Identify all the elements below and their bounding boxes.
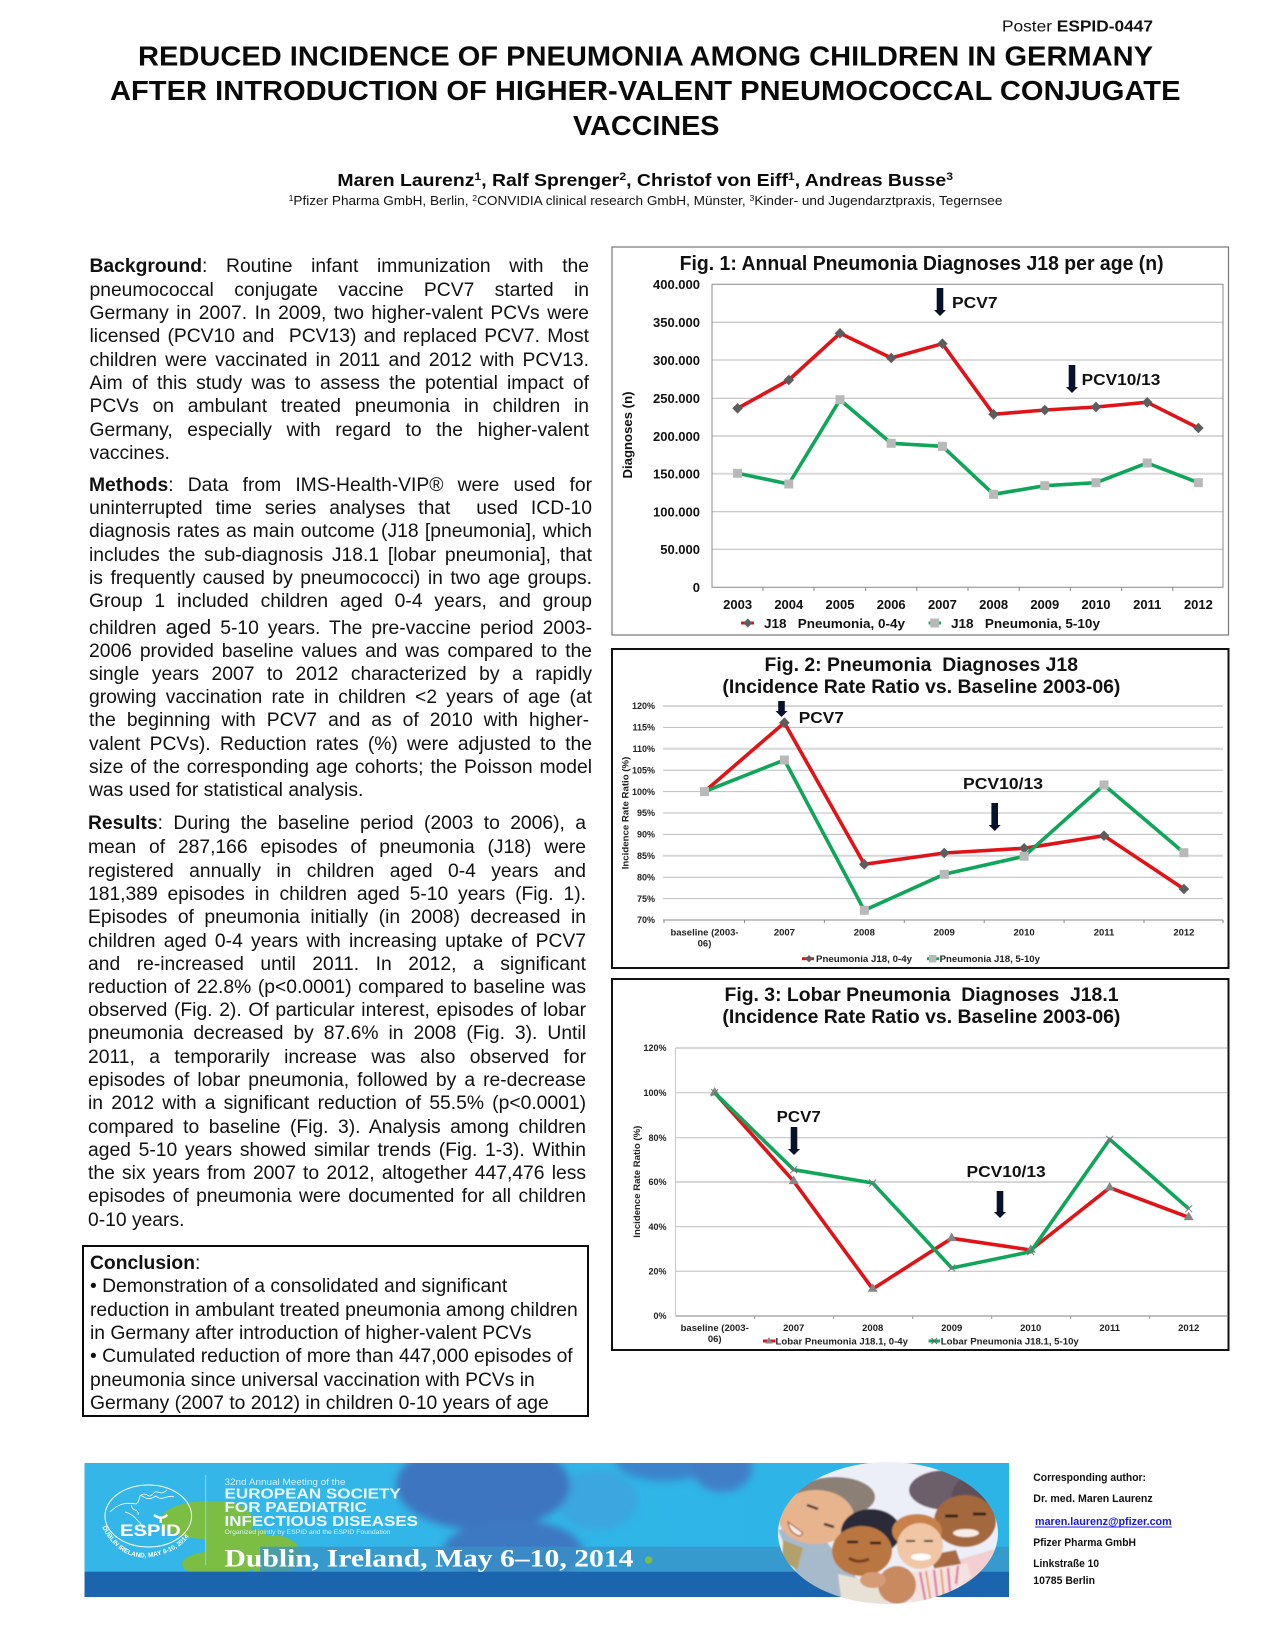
corresponding author: 10785 Berlin	[1033, 1575, 1095, 1587]
text block: methods: Methods: Data from IMS-Health-VIP® were used for	[89, 475, 592, 496]
affiliations: 2	[472, 194, 478, 203]
figure 2 y axis labels: 75%	[637, 894, 655, 904]
panel: conclusion: pneumonia since universal vaccination with PCVs in	[90, 1370, 535, 1391]
text block: results: reduction of 22.8% (p<0.0001) compared to baseline was	[88, 977, 586, 998]
logo caption: DUBLIN IRELAND, MAY 6-10, 2014	[102, 1525, 189, 1558]
figure 3 grid	[676, 1048, 1227, 1319]
arrow: PCV7	[788, 1127, 800, 1155]
figure 3 x axis labels	[681, 1323, 1199, 1345]
figure 3 y axis title: Incidence Rate Ratio (%)	[632, 1126, 643, 1238]
corresponding author	[1033, 1472, 1172, 1587]
text block: results: registered annually in children aged 0-4 years and	[88, 861, 586, 882]
figure 3 x axis labels: 06)	[708, 1334, 722, 1345]
label: PCV10/13: PCV10/13	[963, 776, 1043, 793]
panel: figure 3	[612, 979, 1228, 1350]
figure 2 y axis labels	[632, 701, 655, 925]
label: PCV7: PCV7	[777, 1109, 821, 1126]
figure 3 y axis labels: 120%	[643, 1043, 666, 1053]
authors: Maren Laurenz	[337, 170, 461, 190]
figure 1 y axis labels: 50.000	[660, 542, 700, 557]
text block: methods: is frequently caused by pneumococci) in two age groups.	[89, 568, 592, 589]
label: PCV10/13: PCV10/13	[966, 1164, 1046, 1181]
corresponding author: Pfizer Pharma GmbH	[1033, 1537, 1136, 1549]
label: PCV7: PCV7	[952, 295, 998, 312]
text block: methods: uninterrupted time series analyses that used ICD-10	[89, 498, 592, 519]
banner meeting text	[224, 1477, 634, 1572]
figure 2 legend: Pneumonia J18, 5-10y	[940, 954, 1041, 965]
figure 2 y axis labels: 110%	[632, 744, 655, 754]
figure 1 x axis labels: 2008	[979, 597, 1008, 612]
text block: methods: growing vaccination rate in children <2 years of age (at	[89, 687, 592, 708]
text block: results: observed (Fig. 2). Of particular interest, episodes of lobar	[88, 1000, 586, 1021]
arrow: PCV10/13	[1066, 365, 1078, 393]
figure 2 x axis labels: 06)	[698, 938, 711, 950]
logo: ESPID globe	[102, 1484, 192, 1558]
banner meeting text: 32nd Annual Meeting of the	[224, 1477, 346, 1488]
text block: background: PCVs on ambulant treated pneumonia in children in	[90, 396, 589, 417]
text block: background: Background: Routine infant immunization with the	[90, 256, 589, 277]
text block: results: pneumonia decreased by 87.6% in 2008 (Fig. 3). Until	[88, 1023, 586, 1044]
figure 3 line chart: 5-10y	[711, 1089, 1192, 1272]
authors: 3	[946, 171, 953, 183]
text block: methods	[89, 475, 592, 801]
corresponding author: Linkstraße 10	[1033, 1558, 1099, 1570]
banner meeting text: EUROPEAN SOCIETY	[224, 1486, 401, 1502]
figure 3 y axis labels	[643, 1043, 666, 1321]
text block: background	[90, 256, 589, 464]
corresponding author: Corresponding author:	[1033, 1472, 1146, 1484]
figure 2 x axis labels: 2008	[854, 928, 875, 938]
figure 2 x axis labels: 2009	[934, 928, 955, 938]
figure 2 x axis labels: 2010	[1014, 928, 1035, 938]
banner meeting text: Dublin, Ireland, May 6–10, 2014	[224, 1546, 634, 1572]
text block: background: licensed (PCV10 and PCV13) and replaced PCV7. Most	[90, 326, 589, 347]
figure 2 grid	[663, 706, 1223, 923]
text block: results	[88, 813, 586, 1231]
text block: results: Results: During the baseline period (2003 to 2006), a	[88, 813, 586, 834]
logo figure	[154, 1515, 167, 1523]
figure 2 heading: (Incidence Rate Ratio vs. Baseline 2003-06)	[722, 676, 1120, 698]
text block: methods: 2006 provided baseline values and was compared to the	[89, 641, 592, 662]
figure 2 x axis labels	[670, 928, 1194, 950]
text block: results: episodes of lobar pneumonia, followed by a re-decrease	[88, 1070, 586, 1091]
authors: 1	[474, 171, 481, 183]
banner band	[260, 1547, 1020, 1572]
figure 2 y axis labels: 95%	[637, 808, 655, 818]
figure 2 line chart: 5-10y	[700, 756, 1188, 915]
figure 1 x axis labels: 2006	[877, 597, 906, 612]
label: PCV10/13: PCV10/13	[1082, 372, 1160, 389]
figure 3 line chart: 0-4y	[710, 1087, 1194, 1292]
figure 3 y axis labels: 80%	[648, 1133, 666, 1143]
figure 2 legend	[802, 954, 1041, 965]
figure 2 y axis labels: 80%	[637, 872, 655, 882]
affiliations: CONVIDIA clinical research GmbH, Münster,	[477, 194, 749, 208]
figure 3 y axis labels: 100%	[643, 1088, 666, 1098]
figure 2 y axis labels: 85%	[637, 851, 655, 861]
figure 1 grid	[712, 284, 1223, 591]
label: PCV7: PCV7	[799, 710, 844, 727]
text block: results: 2011, a temporarily increase was also observed for	[88, 1047, 586, 1068]
figure 2 y axis labels: 70%	[637, 915, 655, 925]
left boy	[778, 1528, 888, 1604]
text block: methods: diagnosis rates as main outcome (J18 [pneumonia], which	[89, 521, 592, 542]
figure 1 legend: J18 Pneumonia, 5-10y	[951, 616, 1101, 631]
figure 1 y axis labels: 300.000	[653, 353, 700, 368]
title: VACCINES	[573, 110, 720, 141]
panel: conclusion: reduction in ambulant treated pneumonia among children	[90, 1300, 578, 1321]
authors: , Christof von Eiff	[626, 170, 788, 190]
striped shirt	[911, 1563, 971, 1604]
text block: results: 181,389 episodes in children aged 5-10 years (Fig. 1).	[88, 884, 586, 905]
panel: conclusion: Germany (2007 to 2012) in children 0-10 years of age	[90, 1393, 549, 1414]
text block: background: Germany in 2007. In 2009, two higher-valent PCVs were	[90, 303, 589, 324]
figure 2 line chart: 0-4y	[704, 717, 1189, 894]
figure 1 legend: J18 Pneumonia, 0-4y	[764, 616, 906, 631]
figure 1 y axis labels: 400.000	[653, 277, 700, 292]
figure 1 line chart: 0-4y	[732, 328, 1204, 433]
text block: results: children aged 0-4 years with increasing uptake of PCV7	[88, 931, 586, 952]
figure 2 legend: Pneumonia J18, 0-4y	[816, 954, 913, 965]
right girl	[908, 1470, 962, 1510]
figure 3 x axis labels: baseline (2003-	[681, 1323, 749, 1334]
figure 2 y axis labels: 115%	[632, 723, 655, 733]
corresponding author: maren.laurenz@pfizer.com	[1035, 1516, 1172, 1528]
banner meeting text: Organized jointly by ESPID and the ESPID Foundation	[224, 1530, 390, 1536]
panel: conclusion: • Demonstration of a consolidated and significant	[90, 1276, 507, 1297]
text block: results: in 2012 with a significant reduction of 55.5% (p<0.0001)	[88, 1093, 586, 1114]
text block: results: 0-10 years.	[88, 1210, 184, 1231]
banner meeting text: INFECTIOUS DISEASES	[224, 1514, 418, 1530]
text block: background: Germany, especially with regard to the higher-valent	[90, 420, 589, 441]
figure 1 x axis labels	[723, 597, 1213, 612]
small girl	[890, 1513, 942, 1542]
text block: background: pneumococcal conjugate vaccine PCV7 started in	[90, 280, 589, 301]
figure 1 y axis title: Diagnoses (n)	[620, 392, 635, 478]
figure 2 y axis title: Incidence Rate Ratio (%)	[620, 757, 632, 869]
figure 3 heading: (Incidence Rate Ratio vs. Baseline 2003-06)	[722, 1006, 1120, 1028]
banner shamrock	[161, 1501, 301, 1577]
authors: , Ralf Sprenger	[481, 170, 620, 190]
poster number: Poster ESPID-0447	[1002, 18, 1153, 36]
text block: results: and re-increased until 2011. In 2012, a significant	[88, 954, 586, 975]
text block: results: mean of 287,166 episodes of pneumonia (J18) were	[88, 837, 586, 858]
panel: conclusion: • Cumulated reduction of more than 447,000 episodes of	[90, 1346, 573, 1367]
text block: background: Aim of this study was to assess the potential impact of	[90, 373, 589, 394]
figure 3 heading	[722, 984, 1120, 1028]
figure 1 y axis labels	[653, 277, 700, 595]
figure 1 y axis labels: 350.000	[653, 315, 700, 330]
figure 1 y axis labels: 150.000	[653, 466, 700, 482]
figure 1 y axis labels: 250.000	[653, 391, 700, 406]
affiliations: 1	[289, 194, 294, 203]
logo wordmark: ESPID	[120, 1521, 181, 1540]
banner meeting text: FOR PAEDIATRIC	[224, 1500, 368, 1516]
figure 1 x axis labels: 2012	[1184, 597, 1213, 612]
affiliations: Pfizer Pharma GmbH, Berlin,	[293, 194, 472, 208]
figure 3 x axis labels: 2007	[783, 1323, 804, 1334]
text block: methods: size of the corresponding age cohorts; the Poisson model	[89, 757, 592, 778]
figure 3 legend: Lobar Pneumonia J18.1, 0-4y	[776, 1336, 909, 1348]
figure 3 y axis labels: 60%	[648, 1177, 666, 1187]
text block: methods: the beginning with PCV7 and as of 2010 with higher-	[89, 710, 589, 731]
figure 3 legend	[763, 1336, 1080, 1348]
authors: 1	[788, 171, 795, 183]
figure 2 x axis labels: 2011	[1094, 928, 1115, 938]
figure 2 heading: Fig. 2: Pneumonia Diagnoses J18	[764, 654, 1078, 676]
banner: ESPID 2014 meeting	[84, 1462, 1009, 1604]
figure 2 heading	[722, 654, 1120, 698]
photo: smiling children	[778, 1462, 998, 1604]
text block: methods: Group 1 included children aged 0-4 years, and group	[89, 591, 592, 612]
figure 2 y axis labels: 100%	[632, 787, 655, 797]
figure 1 x axis labels: 2010	[1082, 597, 1110, 612]
hands	[878, 1566, 916, 1604]
figure 3 x axis labels: 2010	[1020, 1323, 1041, 1334]
figure 1 x axis labels: 2005	[826, 597, 854, 612]
figure 2 y axis labels: 105%	[632, 765, 655, 775]
text block: results: Episodes of pneumonia initially (in 2008) decreased in	[88, 907, 586, 928]
figure 3 y axis labels: 20%	[648, 1266, 666, 1276]
figure 3 x axis labels: 2009	[941, 1323, 962, 1334]
text block: results: episodes of pneumonia were documented for all children	[88, 1186, 586, 1207]
title	[110, 40, 1180, 141]
figure 1 y axis labels: 0	[693, 580, 700, 595]
title: AFTER INTRODUCTION OF HIGHER-VALENT PNEUMOCOCCAL CONJUGATE	[110, 75, 1180, 106]
figure 3 legend: Lobar Pneumonia J18.1, 5-10y	[941, 1336, 1080, 1348]
figure 2 x axis labels: 2007	[774, 928, 795, 938]
figure 1 x axis labels: 2007	[928, 597, 957, 612]
panel: conclusion: Conclusion:	[90, 1253, 200, 1274]
banner green dot	[645, 1556, 652, 1564]
figure 2 x axis labels: baseline (2003-	[670, 928, 739, 938]
text block: methods: children aged 5-10 years. The pre-vaccine period 2003-	[89, 616, 592, 639]
affiliations: 3	[749, 194, 755, 203]
text block: results: the six years from 2007 to 2012, altogether 447,476 less	[88, 1163, 586, 1184]
figure 1 heading: Fig. 1: Annual Pneumonia Diagnoses J18 per age (n)	[680, 253, 1164, 275]
arrow: PCV10/13	[994, 1191, 1006, 1218]
text block: background: children were vaccinated in 2011 and 2012 with PCV13.	[90, 350, 589, 371]
authors: , Andreas Busse	[795, 170, 946, 190]
figure 3 y axis labels: 40%	[648, 1222, 666, 1232]
figure 3 x axis labels: 2011	[1099, 1323, 1121, 1334]
centre boy	[840, 1508, 898, 1549]
panel: figure 1	[612, 247, 1228, 635]
figure 3 y axis labels: 0%	[653, 1311, 666, 1321]
text block: methods: was used for statistical analysis.	[89, 780, 363, 801]
corresponding author: Dr. med. Maren Laurenz	[1033, 1493, 1153, 1505]
figure 2 y axis labels: 90%	[637, 830, 655, 840]
text block: methods: includes the sub-diagnosis J18.1 [lobar pneumonia], that	[89, 545, 592, 566]
text block: methods: single years 2007 to 2012 characterized by a rapidly	[89, 664, 592, 685]
arrow: PCV7	[934, 288, 946, 316]
figure 1 x axis labels: 2003	[723, 597, 752, 612]
affiliations: Kinder- und Jugendarztpraxis, Tegernsee	[754, 194, 1002, 208]
arrow: PCV10/13	[989, 803, 1001, 831]
panel: figure 2	[612, 649, 1228, 968]
figure 1 x axis labels: 2011	[1133, 597, 1161, 612]
text block: background: vaccines.	[90, 443, 170, 464]
authors: 2	[619, 171, 626, 183]
title: REDUCED INCIDENCE OF PNEUMONIA AMONG CHILDREN IN GERMANY	[138, 40, 1153, 72]
figure 1 legend	[741, 616, 1101, 631]
figure 3 x axis labels: 2012	[1178, 1323, 1199, 1334]
figure 1 line chart: 5-10y	[733, 395, 1203, 499]
arrow: PCV7	[776, 701, 788, 717]
text block: methods: valent PCVs). Reduction rates (%) were adjusted to the	[89, 734, 592, 755]
panel: conclusion: in Germany after introduction of higher-valent PCVs	[90, 1323, 532, 1344]
figure 1 y axis labels: 200.000	[653, 429, 700, 444]
figure 1 x axis labels: 2004	[774, 597, 804, 612]
banner divider	[205, 1475, 207, 1565]
figure 2 y axis labels: 120%	[632, 701, 655, 711]
figure 2 x axis labels: 2012	[1173, 928, 1194, 938]
figure 1 y axis labels: 100.000	[653, 504, 700, 520]
panel: conclusion	[82, 1245, 589, 1417]
figure 3 heading: Fig. 3: Lobar Pneumonia Diagnoses J18.1	[724, 984, 1119, 1006]
banner bubbles	[84, 1463, 1009, 1597]
figure 3 x axis labels: 2008	[862, 1323, 883, 1334]
text block: results: aged 5-10 years showed similar trends (Fig. 1-3). Within	[88, 1140, 586, 1161]
figure 1 x axis labels: 2009	[1030, 597, 1059, 612]
text block: results: compared to baseline (Fig. 3). Analysis among children	[88, 1117, 586, 1138]
